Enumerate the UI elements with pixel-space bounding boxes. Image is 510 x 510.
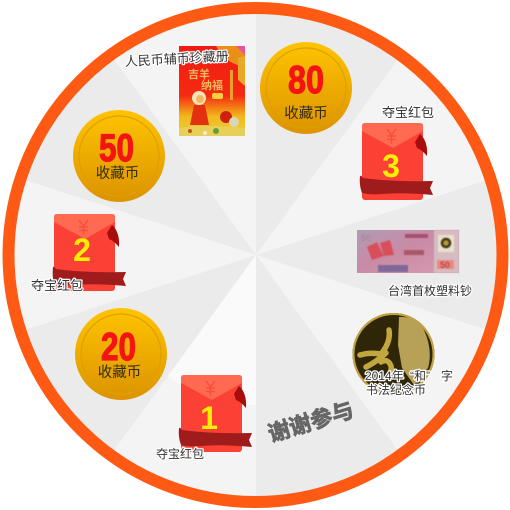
label: red envelope 2: 夺宝红包 xyxy=(31,278,83,293)
sector: banknote xyxy=(256,180,498,330)
banknote picture xyxy=(357,230,459,273)
coin: 50: 收藏币 xyxy=(96,165,139,182)
label: commemorative coin xyxy=(365,368,453,397)
sector: thanks xyxy=(256,255,398,497)
collection album picture: 吉羊 xyxy=(188,67,210,81)
collection album picture xyxy=(179,46,245,136)
red envelope: 1: 1 xyxy=(200,400,218,436)
thanks for participating: 谢谢参与 xyxy=(265,397,357,447)
label: commemorative coin: 字 xyxy=(441,368,453,383)
coin: 50: 50 xyxy=(99,127,134,170)
banknote picture: 50 xyxy=(361,233,371,243)
label: banknote: 台湾首枚塑料钞 xyxy=(388,283,472,298)
coin: 80 xyxy=(260,42,352,134)
label: red envelope 3: 夺宝红包 xyxy=(382,105,434,120)
label: commemorative coin: 书法纪念币 xyxy=(366,382,426,397)
red envelope: 1 xyxy=(179,375,252,452)
coin: 80: 80 xyxy=(288,59,324,102)
sector: 20 coins xyxy=(26,255,256,451)
sector: inner highlight xyxy=(168,255,256,405)
red envelope: 3 xyxy=(360,123,433,200)
coin: 20: 20 xyxy=(101,326,136,369)
label: commemorative coin: 2014年 xyxy=(365,369,404,383)
coin: 20 xyxy=(75,308,167,400)
sector: 50 coins xyxy=(26,59,256,255)
coin: 20: 收藏币 xyxy=(98,364,141,381)
label: album: 人民币辅币珍藏册 xyxy=(124,49,229,69)
red envelope: 2: 2 xyxy=(73,232,91,268)
red envelope: 2 xyxy=(53,214,126,291)
label: red envelope 1: 夺宝红包 xyxy=(156,446,204,461)
red envelope: 3: 3 xyxy=(382,148,400,184)
banknote picture: 50 xyxy=(440,260,450,270)
label: commemorative coin: “和” xyxy=(410,369,430,383)
sector: 80 coins xyxy=(256,13,398,255)
coin: 80: 收藏币 xyxy=(284,105,328,122)
coin: 50 xyxy=(73,110,165,202)
commemorative coin picture xyxy=(352,313,434,395)
collection album picture: 纳福 xyxy=(201,78,223,92)
